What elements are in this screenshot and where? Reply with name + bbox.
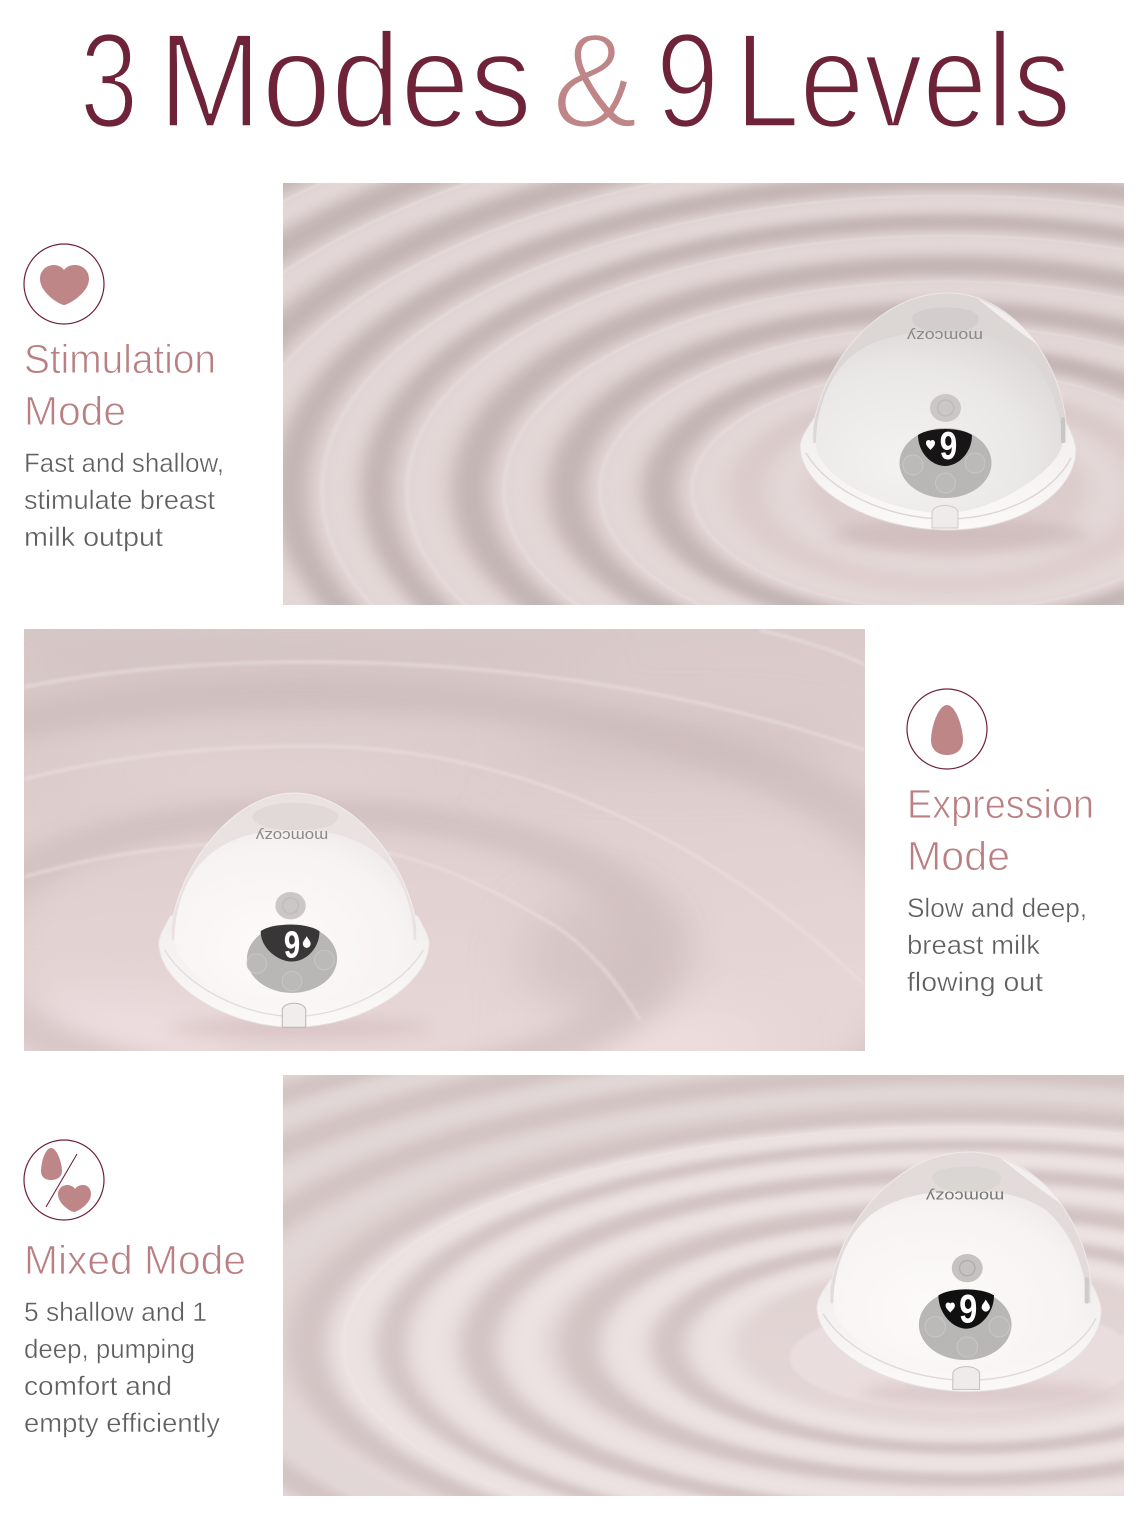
text block: expression mode: Expression [907,781,1094,827]
text block: mixed mode [24,1140,246,1438]
text block: stimulation mode: Stimulation [24,336,216,382]
pump device: 9 [939,426,958,472]
dome shadow [830,519,1090,551]
text block: expression mode: Mode [907,833,1010,879]
text block: stimulation mode: Fast and shallow, [24,448,224,478]
text block: stimulation mode: stimulate breast [24,485,215,515]
panel: mixed mode ripple photo [283,1075,1124,1496]
text block: expression mode: Slow and deep, [907,893,1087,923]
ripple rings [283,183,1124,605]
title: Modes [158,5,532,156]
title: 3 [80,5,138,156]
title: & [552,5,638,156]
text block: expression mode: flowing out [907,967,1044,997]
pump device [817,1152,1101,1391]
pump device [800,293,1076,530]
text block: mixed mode: 5 shallow and 1 [24,1297,207,1327]
text block: expression mode [907,689,1094,997]
ripple rings [283,1075,1124,1496]
pump device: momcozy [906,327,983,344]
text block: expression mode: breast milk [907,930,1041,960]
title: Levels [735,5,1071,156]
title [80,5,1071,156]
text block: stimulation mode: milk output [24,522,164,552]
text block: stimulation mode: Mode [24,388,126,434]
ripple lines [24,630,865,1020]
icon: drop and heart [24,1140,104,1220]
text block: mixed mode: Mixed Mode [24,1237,246,1283]
panel: stimulation mode ripple photo [283,183,1124,605]
text block: mixed mode: deep, pumping [24,1334,195,1364]
soft blobs [76,908,629,1028]
icon: drop [907,689,987,769]
soft ripple bands [24,686,865,1051]
panel: expression mode ripple photo [24,629,865,1051]
pump device: 9 [283,926,301,971]
pump device: momcozy [926,1187,1004,1204]
icon: heart [24,244,104,324]
pump device: momcozy [255,827,328,843]
title: 9 [656,5,719,156]
pump device [159,793,429,1027]
dome shadow [860,1381,1110,1405]
pump device: 9 [958,1288,978,1336]
dome shadow [170,1018,430,1038]
text block: mixed mode: comfort and [24,1371,172,1401]
center disk [792,1326,1124,1366]
text block: stimulation mode [24,244,224,552]
text block: mixed mode: empty efficiently [24,1408,221,1438]
